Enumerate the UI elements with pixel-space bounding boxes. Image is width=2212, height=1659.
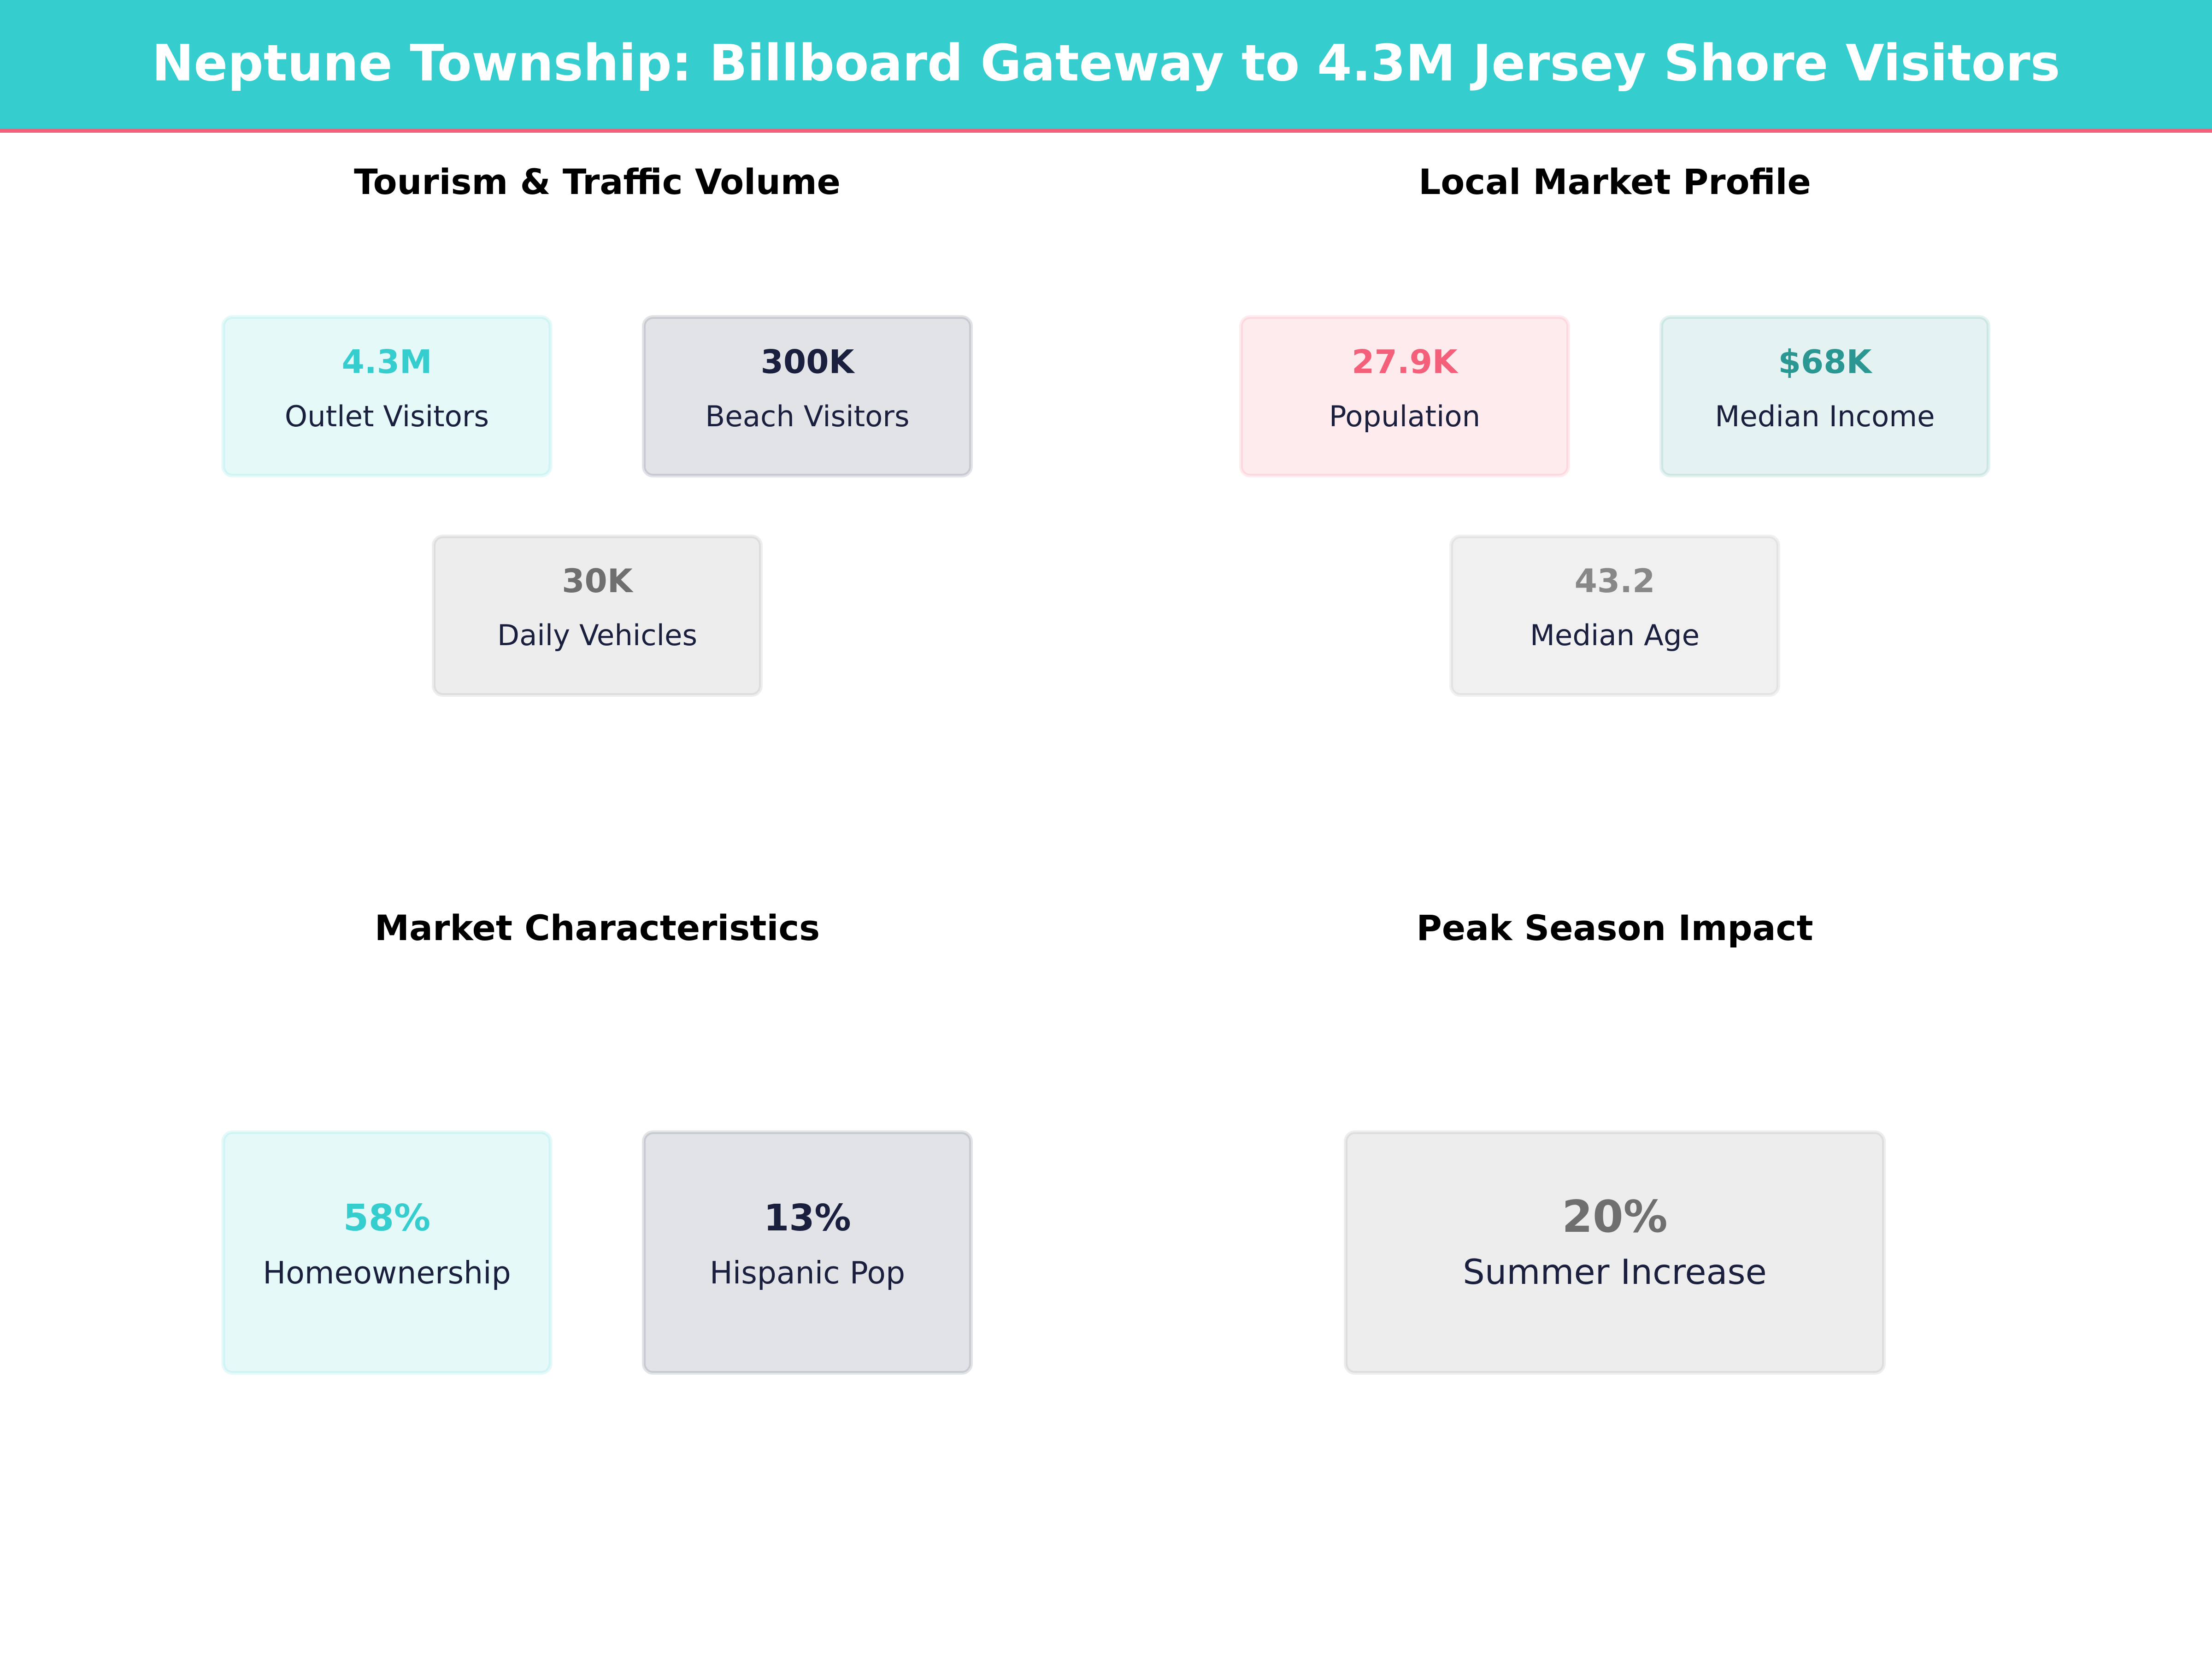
stat card: summer increase: 20% [1562, 1191, 1668, 1242]
heading: market characteristics: Market Characteristics [375, 908, 820, 948]
stat card: hispanic population: Hispanic Pop [710, 1255, 905, 1291]
stat card: population: Population [1329, 400, 1480, 433]
stat card: population [1241, 317, 1568, 476]
title: Neptune Township: Billboard Gateway to 4.3M Jersey Shore Visitors [152, 34, 2060, 92]
stat card: homeownership: Homeownership [263, 1255, 511, 1291]
panel: tourism and traffic volume [223, 162, 971, 695]
stat card: median age [1451, 536, 1778, 695]
stat card: beach visitors: Beach Visitors [705, 400, 910, 433]
heading: peak season impact: Peak Season Impact [1416, 908, 1813, 948]
stat card: median income: $68K [1778, 343, 1873, 381]
stat card: outlet visitors: 4.3M [342, 343, 432, 381]
stat card: median income: Median Income [1715, 400, 1935, 433]
stat card: population: 27.9K [1352, 343, 1459, 381]
stat card: summer increase: Summer Increase [1463, 1252, 1767, 1292]
stat card: beach visitors: 300K [761, 343, 855, 381]
stat card: homeownership [223, 1132, 550, 1373]
stat card: outlet visitors [223, 317, 550, 476]
stat card: beach visitors [644, 317, 971, 476]
stat card: outlet visitors: Outlet Visitors [285, 400, 489, 433]
panel: local market profile [1241, 162, 1988, 695]
panel: market characteristics [223, 908, 971, 1373]
stat card: summer increase [1346, 1132, 1884, 1373]
stat card: homeownership: 58% [343, 1197, 430, 1239]
stat card: daily vehicles: 30K [562, 562, 634, 600]
heading: local market profile: Local Market Profile [1418, 162, 1811, 202]
stat card: hispanic population [644, 1132, 971, 1373]
stat card: daily vehicles: Daily Vehicles [497, 618, 697, 652]
stat card: median income [1661, 317, 1988, 476]
stat card: median age: Median Age [1530, 618, 1700, 652]
stat card: median age: 43.2 [1575, 562, 1655, 600]
heading: tourism and traffic volume: Tourism & Traffic Volume [354, 162, 841, 202]
panel: peak season impact [1346, 908, 1884, 1373]
stat card: daily vehicles [434, 536, 761, 695]
stat card: hispanic population: 13% [764, 1197, 851, 1239]
header banner [0, 0, 2212, 133]
